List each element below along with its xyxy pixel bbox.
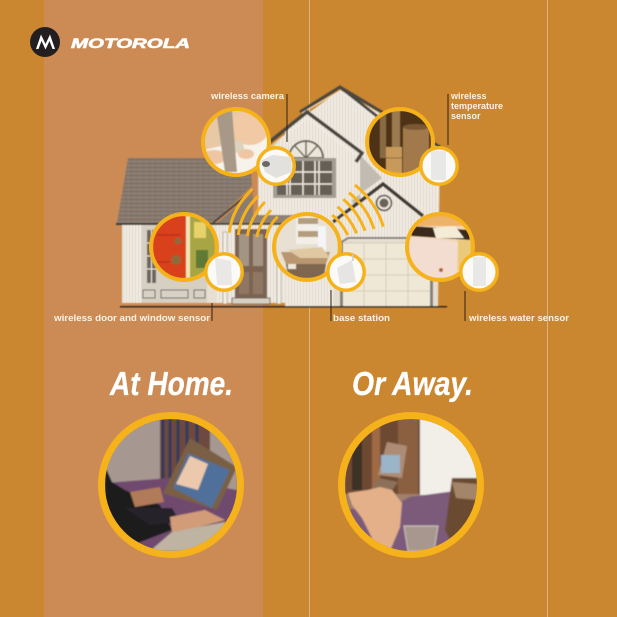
desk photo [272, 212, 342, 282]
callout: temperature sensor [365, 107, 459, 186]
base station device [326, 252, 366, 292]
logo emblem [30, 27, 60, 57]
label: base station: base station [333, 313, 390, 323]
water sensor device [459, 252, 499, 292]
front gable wall [258, 115, 360, 225]
callout: wireless camera [201, 107, 296, 186]
callout: door and window sensor [149, 212, 244, 292]
front gable roof [262, 112, 362, 162]
ground line [120, 306, 447, 308]
porch steps [232, 298, 270, 304]
vertical rule right [547, 0, 548, 617]
left wing bay [142, 225, 207, 303]
Motorola logo [30, 27, 190, 57]
temperature sensor device [419, 146, 459, 186]
vertical rule left [309, 0, 310, 617]
wireless signal arcs left [229, 189, 278, 238]
callout: base station [272, 212, 366, 292]
camera device [256, 146, 296, 186]
leader line door sensor [212, 303, 213, 321]
door sensor device [204, 252, 244, 292]
heading: Or Away: Or Away. [352, 365, 473, 402]
front door [235, 229, 267, 298]
label: wireless temperature sensor: wireless [450, 91, 487, 101]
garage gable [333, 184, 426, 240]
label: wireless door and window sensor: wireless door and window sensor [53, 313, 211, 323]
leader line base station [330, 290, 332, 321]
upper arched window [273, 141, 336, 198]
callout: water sensor [405, 212, 499, 292]
left wing wall [122, 225, 217, 303]
label: wireless water sensor: wireless water sensor [468, 313, 570, 323]
leader line camera [286, 94, 288, 142]
porch [213, 190, 313, 304]
label: wireless camera: wireless camera [210, 91, 285, 101]
leader line temperature [448, 94, 449, 145]
heading: At Home: At Home. [109, 365, 233, 402]
door photo [149, 212, 219, 282]
camera photo: sleeping baby [201, 107, 271, 177]
rear roof edge [300, 87, 440, 147]
laundry photo [405, 212, 475, 282]
upper rear gable wall [285, 90, 440, 307]
photo: laptop at home [98, 412, 244, 558]
leader line water sensor [464, 291, 466, 321]
left wing roof [117, 158, 252, 223]
water heater photo [365, 107, 435, 177]
label: wireless temperature sensor: sensor [451, 111, 481, 121]
garage door [333, 238, 438, 307]
left light panel [44, 0, 263, 617]
gable shadow [330, 155, 382, 225]
wireless signal arcs right [332, 185, 383, 235]
house illustration [116, 87, 447, 308]
label: wireless temperature sensor: temperature [451, 101, 503, 111]
logo wordmark: MOTOROLA [71, 35, 190, 51]
photo: phone when away [338, 412, 484, 558]
